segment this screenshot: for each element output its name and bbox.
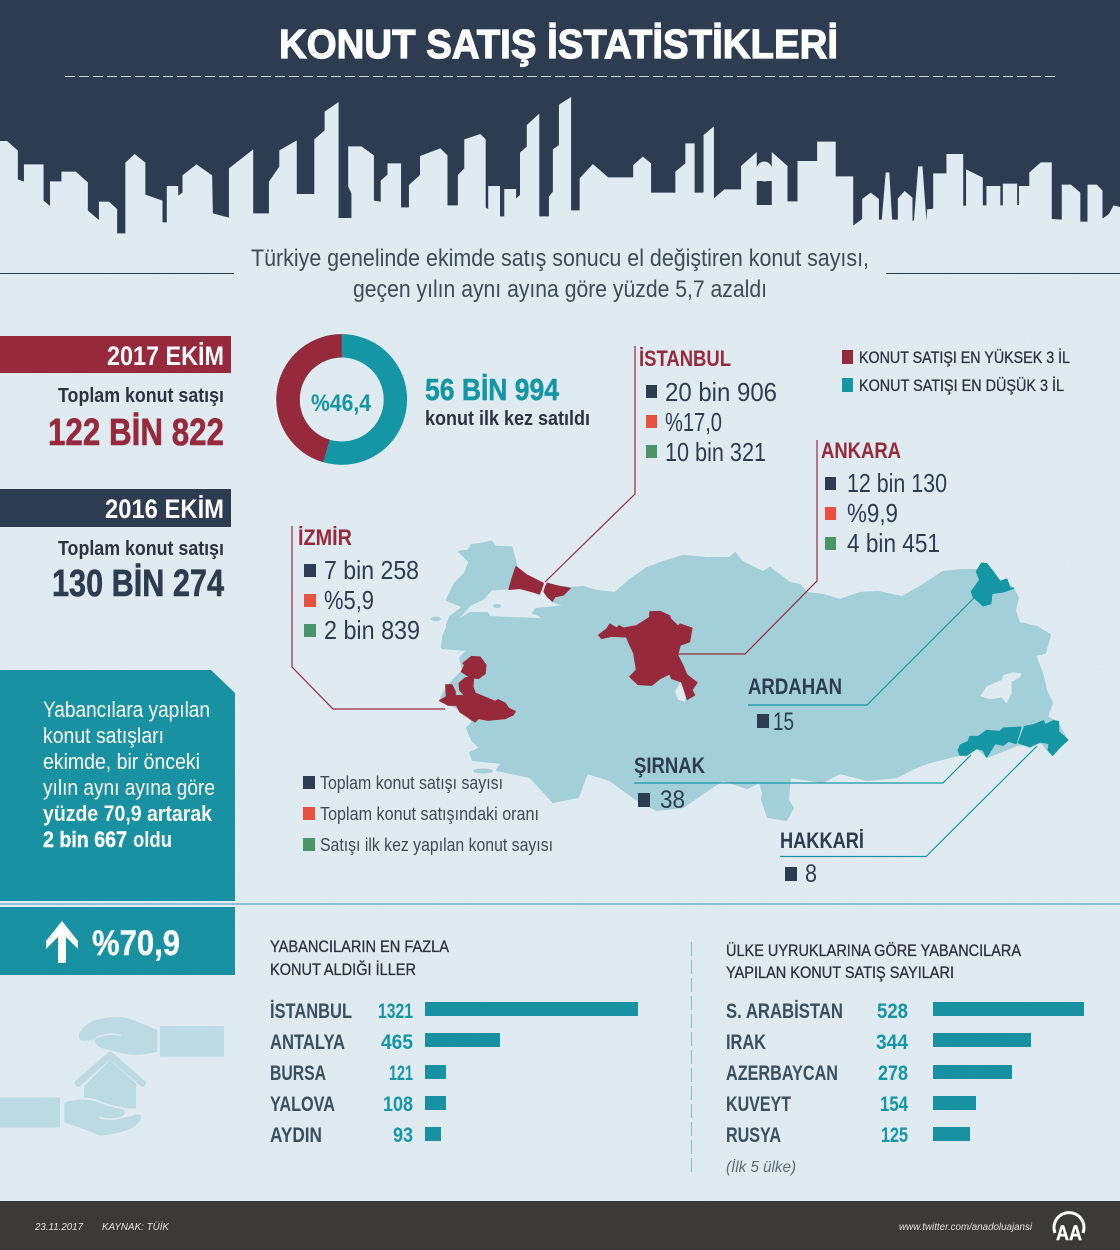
province: Ardahan	[972, 563, 1013, 606]
city stats: İstanbul: 20 bin 906	[665, 377, 777, 407]
legend: indicators: Toplam konut satışı sayısı	[320, 773, 503, 793]
lake: Van	[980, 672, 1022, 703]
map label: Hakkari: 8	[805, 860, 817, 888]
map label: Ardahan	[748, 674, 842, 736]
city stats: İstanbul	[639, 346, 777, 467]
city stats: İstanbul: İSTANBUL	[639, 346, 731, 371]
bar chart: countries: IRAK	[726, 1031, 766, 1054]
bar chart: countries: (İlk 5 ülke)	[726, 1157, 796, 1176]
callout: first-time sales: 56 BİN 994	[425, 372, 560, 407]
panel: 2017 Ekim: 122 BİN 822	[48, 412, 224, 454]
city stats: Ankara: 4 bin 451	[847, 528, 940, 558]
city stats: İzmir: %5,9	[324, 585, 374, 615]
panel: percent increase: %70,9	[92, 924, 180, 963]
bar chart: provinces: 108	[383, 1093, 413, 1116]
footer: KAYNAK: TÜİK	[102, 1221, 170, 1233]
panel: 2016 Ekim	[0, 489, 231, 605]
bar chart: countries	[726, 941, 1084, 1176]
bar chart: provinces: BURSA	[270, 1062, 326, 1085]
panel: 2016 Ekim: 130 BİN 274	[52, 563, 224, 605]
panel: foreign sales text	[0, 670, 235, 901]
legend: highest and lowest provinces: KONUT SATIŞI EN DÜŞÜK 3 İL	[859, 376, 1064, 395]
panel: foreign sales text: 2 bin 667	[43, 827, 127, 852]
header with city skyline	[0, 0, 1120, 250]
bar chart: countries: S. ARABİSTAN	[726, 1000, 843, 1023]
bar chart: countries: 528	[877, 1000, 908, 1023]
bar chart: countries: 125	[881, 1124, 908, 1147]
panel: foreign sales text: ekimde, bir önceki	[43, 749, 200, 774]
title: KONUT SATIŞ İSTATİSTİKLERİ	[279, 21, 838, 67]
bar chart: provinces: AYDIN	[270, 1124, 322, 1147]
province: Ankara	[599, 612, 697, 699]
city stats: Ankara	[821, 438, 947, 558]
panel: foreign sales text: konut satışları	[43, 723, 164, 748]
bar chart: provinces: KONUT ALDIĞI İLLER	[270, 960, 416, 979]
province: İzmir	[440, 657, 515, 722]
city stats: Ankara: 12 bin 130	[847, 468, 947, 498]
map of Turkey	[431, 542, 1068, 820]
panel: foreign sales text: Yabancılara yapılan	[43, 697, 210, 722]
panel: 2016 Ekim: Toplam konut satışı	[58, 538, 224, 560]
footer	[0, 1201, 1120, 1250]
bar chart: provinces	[270, 937, 638, 1147]
legend: indicators: Satışı ilk kez yapılan konut sayısı	[320, 835, 553, 855]
bar chart: countries: AZERBAYCAN	[726, 1062, 838, 1085]
city stats: İstanbul: 10 bin 321	[665, 437, 766, 467]
footer: 23.11.2017	[34, 1222, 83, 1233]
panel: 2017 Ekim: Toplam konut satışı	[58, 385, 224, 407]
bar chart: countries: KUVEYT	[726, 1093, 791, 1116]
city stats: İzmir: 7 bin 258	[324, 555, 419, 585]
bar chart: provinces: YABANCILARIN EN FAZLA	[270, 937, 450, 956]
bar chart: provinces: 93	[393, 1124, 413, 1147]
panel: 2017 Ekim: 2017 EKİM	[107, 341, 224, 371]
legend: indicators	[303, 773, 553, 855]
bar chart: countries: ÜLKE UYRUKLARINA GÖRE YABANCILARA	[726, 941, 1022, 960]
footer: www.twitter.com/anadoluajansi	[899, 1222, 1033, 1233]
map label: Ardahan: 15	[773, 708, 794, 736]
city stats: İzmir: 2 bin 839	[324, 615, 420, 645]
callout: first-time sales: konut ilk kez satıldı	[425, 408, 590, 430]
panel: foreign sales text: yüzde 70,9 artarak	[43, 801, 213, 826]
panel: foreign sales text: yılın aynı ayına göre	[43, 775, 215, 800]
province: Hakkari	[1019, 721, 1068, 755]
map label: Ardahan: ARDAHAN	[748, 674, 842, 699]
bar chart: countries: RUSYA	[726, 1124, 781, 1147]
connector lines	[292, 346, 1037, 856]
callout: first-time sales	[425, 372, 590, 430]
bar chart: provinces: ANTALYA	[270, 1031, 345, 1054]
map label: Şırnak: 38	[660, 786, 685, 814]
panel: 2017 Ekim	[0, 336, 231, 454]
icon: up arrow	[46, 921, 78, 963]
map label: Hakkari: HAKKARİ	[780, 828, 864, 853]
icon: hands protecting house	[0, 1017, 224, 1137]
divider line	[0, 903, 1120, 905]
bar chart: provinces: 121	[389, 1062, 413, 1085]
icon: AA logo: AA	[1056, 1222, 1082, 1245]
panel: 2016 Ekim: 2016 EKİM	[105, 494, 224, 524]
panel: foreign sales text: oldu	[133, 827, 172, 852]
city stats: İzmir	[298, 525, 420, 645]
lake: Tuz	[675, 680, 686, 702]
province: İstanbul	[509, 567, 570, 601]
map label: Şırnak	[634, 753, 705, 814]
subtitle: geçen yılın aynı ayına göre yüzde 5,7 azaldı	[353, 276, 767, 303]
bar chart: countries: 278	[878, 1062, 908, 1085]
legend: highest and lowest provinces: KONUT SATIŞI EN YÜKSEK 3 İL	[859, 348, 1070, 367]
bar chart: provinces: 465	[381, 1031, 413, 1054]
city stats: İstanbul: %17,0	[665, 407, 722, 437]
bar chart: provinces: YALOVA	[270, 1093, 335, 1116]
legend: highest and lowest provinces	[842, 348, 1070, 395]
map label: Şırnak: ŞIRNAK	[634, 753, 705, 778]
subtitle	[0, 245, 1120, 303]
bar chart: countries: YAPILAN KONUT SATIŞ SAYILARI	[726, 963, 954, 982]
province: Şırnak	[958, 727, 1021, 757]
bar chart: countries: 154	[880, 1093, 908, 1116]
panel: percent increase	[0, 907, 235, 975]
subtitle: Türkiye genelinde ekimde satış sonucu el değiştiren konut sayısı,	[251, 245, 869, 272]
legend: indicators: Toplam konut satışındaki oranı	[320, 804, 539, 824]
bar chart: provinces: 1321	[378, 1000, 413, 1023]
map label: Hakkari	[780, 828, 864, 888]
city stats: Ankara: ANKARA	[821, 438, 901, 463]
bar chart: countries: 344	[876, 1031, 908, 1054]
icon: AA logo	[1054, 1213, 1084, 1245]
donut chart: %46,4	[311, 390, 372, 417]
donut chart	[288, 346, 395, 453]
city stats: Ankara: %9,9	[847, 498, 898, 528]
bar chart: provinces: İSTANBUL	[270, 1000, 352, 1023]
city stats: İzmir: İZMİR	[298, 525, 352, 550]
